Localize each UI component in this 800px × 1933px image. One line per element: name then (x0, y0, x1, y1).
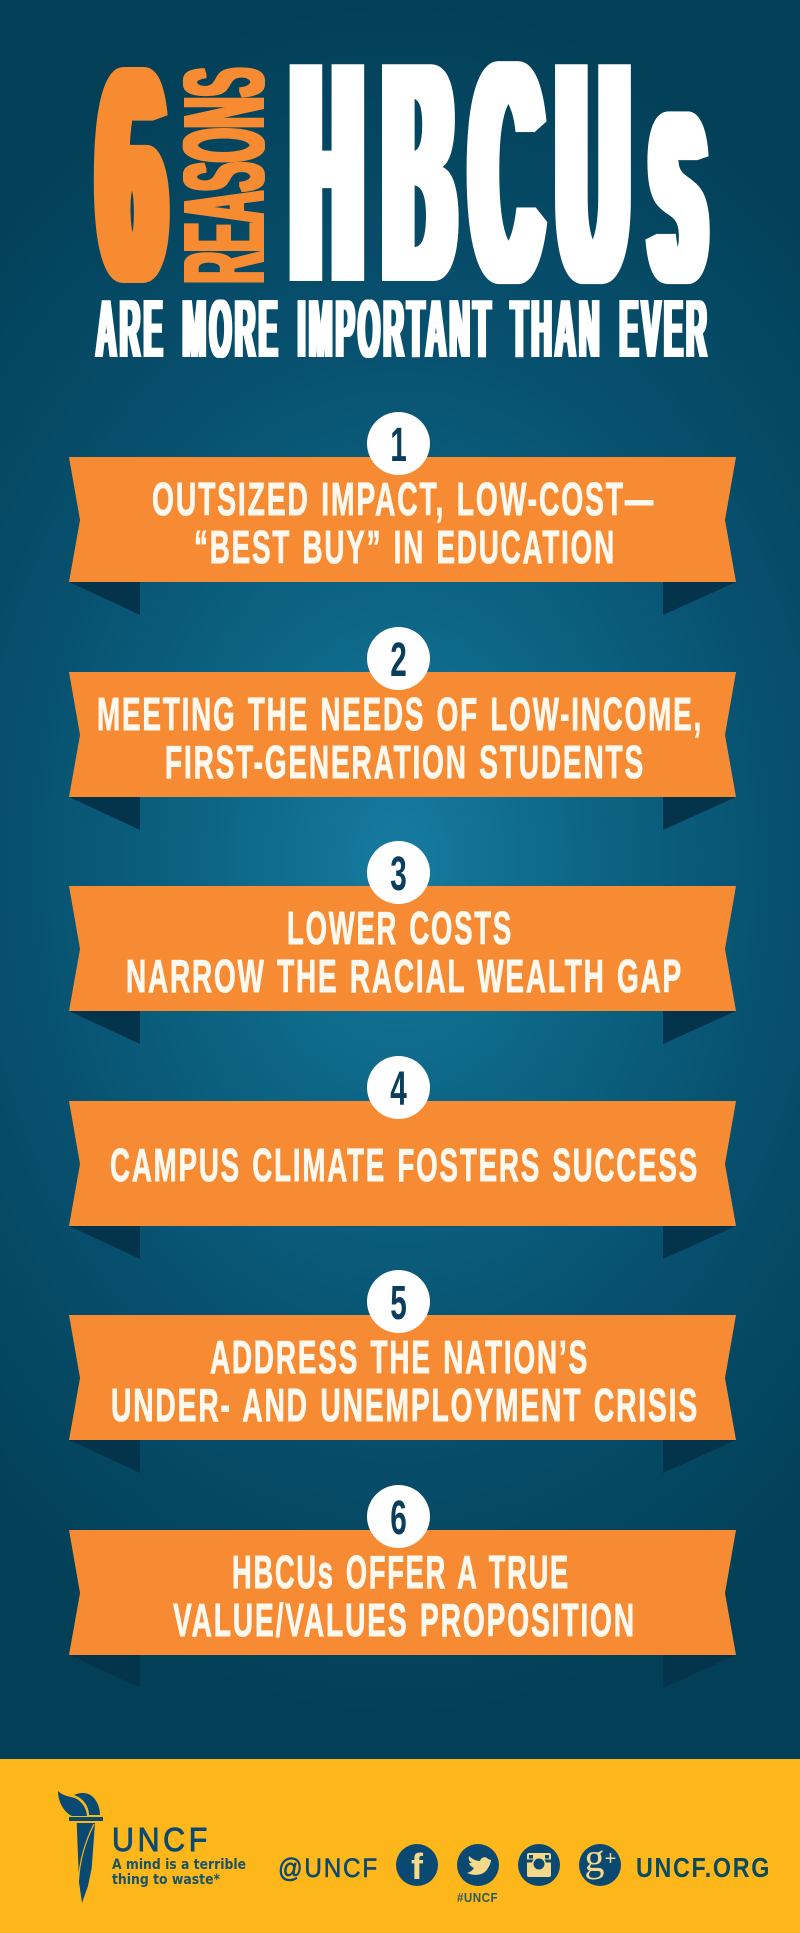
website: UNCF.ORG (636, 1852, 771, 1883)
panel: reason 4 (69, 1056, 736, 1259)
icon: twitter (457, 1844, 499, 1886)
logo tagline: A mind is a terrible (112, 1857, 246, 1873)
panel: footer (0, 1759, 800, 1933)
panel: reason 6 (69, 1485, 736, 1688)
hashtag: #UNCF (457, 1891, 498, 1905)
icon: facebook: f (411, 1846, 424, 1887)
panel: reason 3: LOWER COSTS (287, 902, 513, 954)
panel: reason 1: 1 (390, 419, 407, 472)
numeral 6: 6 (100, 4, 164, 345)
panel: reason 3 (69, 841, 736, 1044)
icon: google plus: + (605, 1848, 616, 1870)
word HBCUs: HBCUs (293, 0, 704, 349)
icon: google plus: g (584, 1835, 604, 1880)
panel: reason 4: 4 (390, 1063, 407, 1116)
panel: reason 6: HBCUs OFFER A TRUE (232, 1546, 570, 1598)
panel: reason 2 (69, 627, 736, 830)
word REASONS rotated: REASONS (161, 68, 288, 283)
logo tagline (112, 1857, 246, 1888)
logo wordmark: UNCF (112, 1821, 211, 1858)
icon: instagram (518, 1844, 560, 1886)
panel: reason 6: 6 (390, 1492, 407, 1545)
panel: reason 5: 5 (390, 1277, 407, 1330)
twitter handle: @UNCF (278, 1853, 379, 1883)
icon: facebook (396, 1844, 438, 1887)
title: 6 reasons HBCUs (100, 0, 704, 349)
panel: reason 5 (69, 1270, 736, 1473)
panel: reason 3: 3 (390, 848, 407, 901)
panel: reason 1 (69, 412, 736, 615)
icon: UNCF torch (58, 1791, 103, 1903)
icon: google plus (579, 1835, 621, 1886)
logo tagline: thing to waste* (112, 1872, 221, 1888)
panel: reason 2: 2 (390, 634, 407, 687)
